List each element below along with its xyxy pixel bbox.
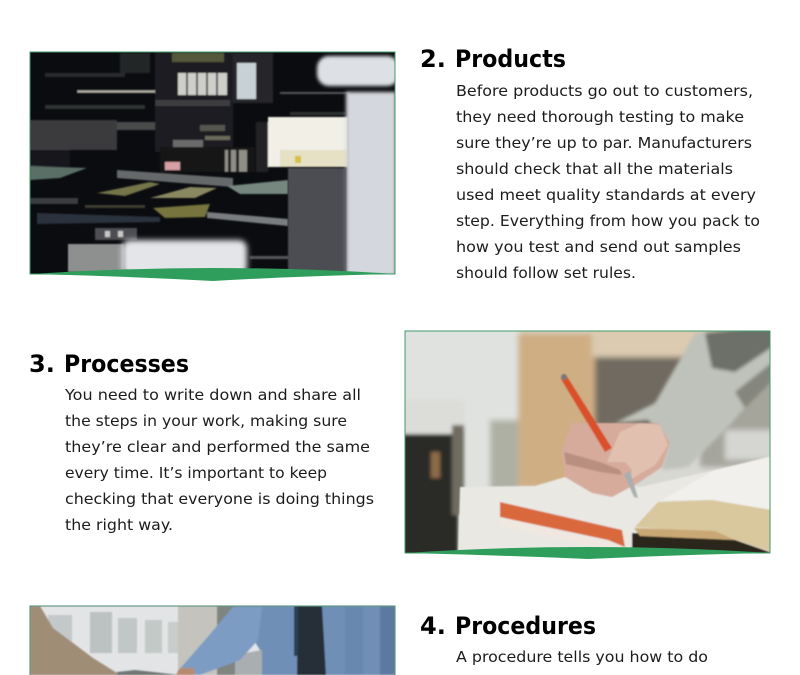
section 3: processes body text: they’re clear and performed the same — [65, 438, 370, 456]
section 2: products body text — [456, 82, 760, 282]
section 3: processes heading: 3. — [29, 350, 55, 378]
section 2: products body text: sure they’re up to par. Manufacturers — [456, 134, 752, 152]
section 2: products body text: should check that all the materials — [456, 160, 733, 178]
section 3: processes body text: every time. It’s important to keep — [65, 464, 327, 482]
section 2: products heading: 2. — [420, 45, 446, 73]
section 4: procedures photo — [30, 606, 395, 675]
section 2: products body text: how you test and send out samples — [456, 238, 741, 256]
section 3: processes body text: the steps in your work, making sure — [65, 412, 347, 430]
section 3: processes body text — [64, 386, 374, 534]
section 3: processes heading: Processes — [64, 350, 189, 378]
section 3: processes photo — [395, 325, 782, 559]
section 2: products body text: used meet quality standards at every — [456, 186, 756, 204]
section 4: procedures body text: A procedure tells you how to do — [456, 648, 708, 666]
section 3: processes body text: the right way. — [65, 516, 173, 534]
section 2: products body text: should follow set rules. — [456, 264, 636, 282]
section 2: products photo — [30, 52, 399, 281]
section 4: procedures heading: 4. — [420, 612, 446, 640]
green wave under photo — [30, 268, 395, 281]
section 4: procedures heading: Procedures — [455, 612, 596, 640]
section 3: processes body text: You need to write down and share all — [64, 386, 361, 404]
section 3: processes body text: checking that everyone is doing things — [65, 490, 374, 508]
section 2: products body text: step. Everything from how you pack to — [456, 212, 760, 230]
green wave under photo — [405, 547, 770, 559]
section 2: products body text: Before products go out to customers, — [456, 82, 753, 100]
section 2: products heading: Products — [455, 45, 566, 73]
section 2: products body text: they need thorough testing to make — [456, 108, 744, 126]
